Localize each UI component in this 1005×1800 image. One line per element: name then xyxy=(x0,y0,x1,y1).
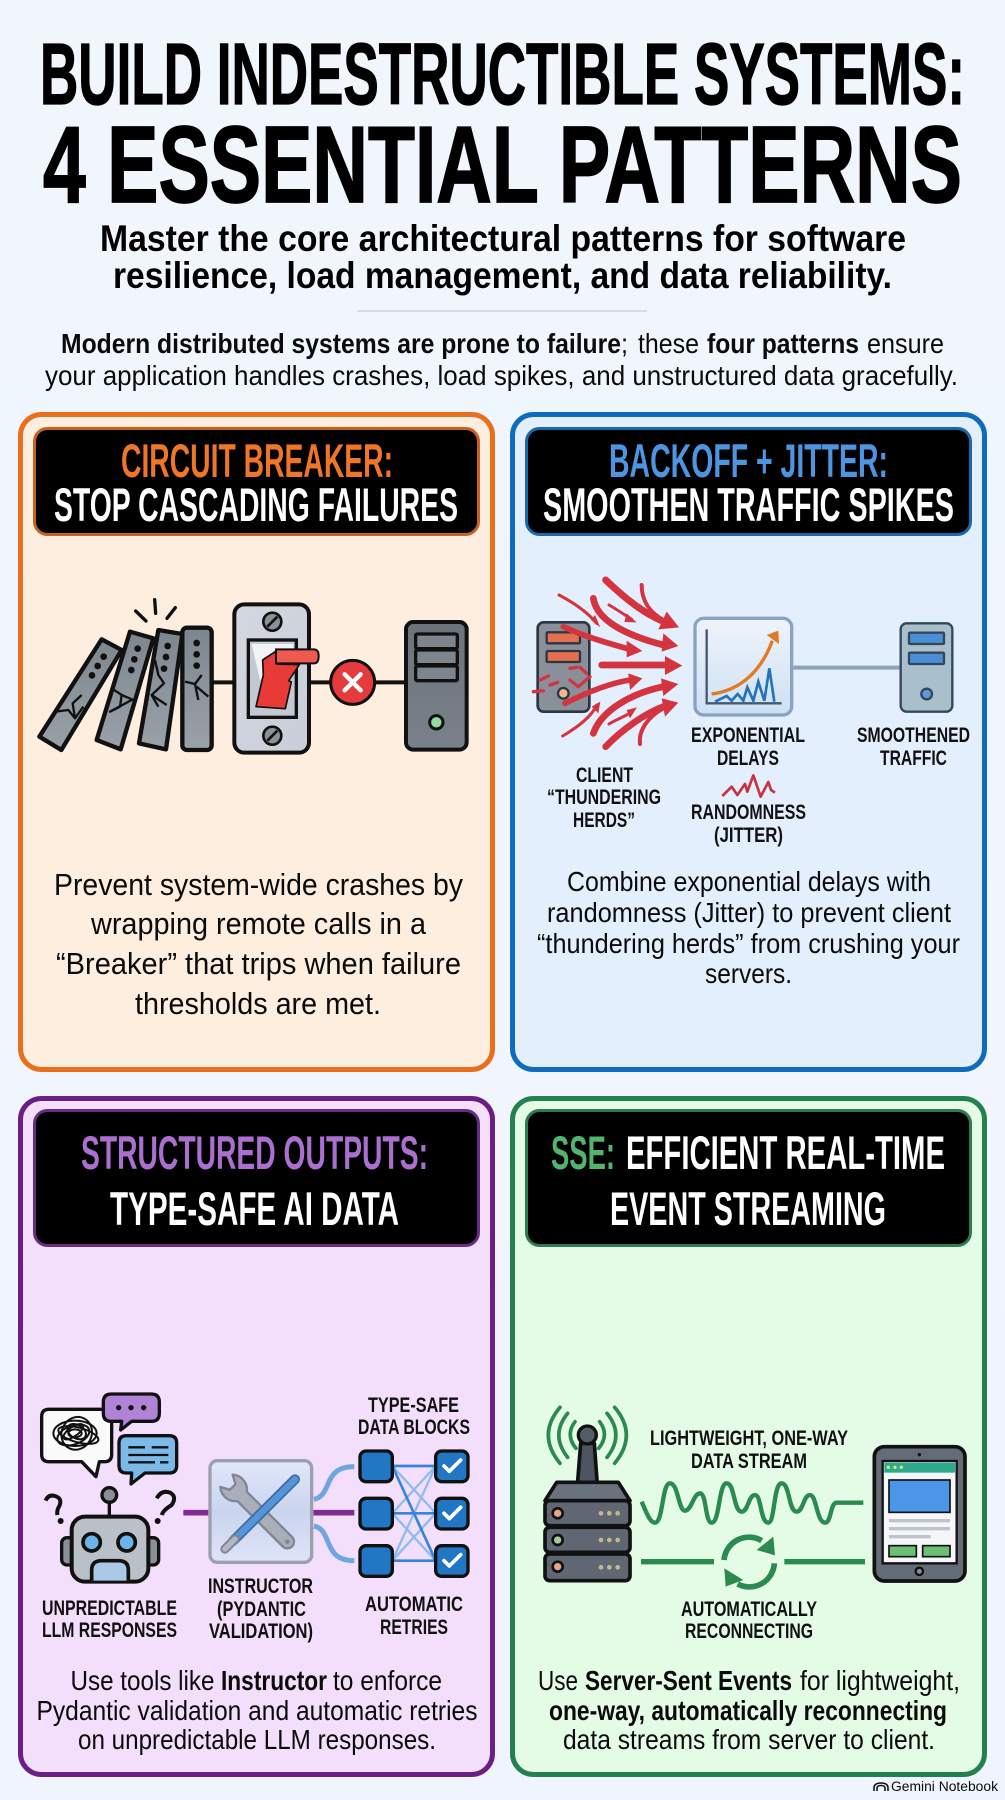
diagram: robot, instructor tools, data blocks xyxy=(42,1394,468,1582)
heading: structured outputs: TYPE-SAFE AI DATA xyxy=(110,1183,399,1236)
description: circuit breaker: thresholds are met. xyxy=(135,986,381,1021)
panel: backoff and jitter xyxy=(512,414,984,1070)
description: backoff and jitter xyxy=(537,866,960,989)
description: structured outputs: to enforce xyxy=(333,1665,442,1696)
label: instructor pydantic validation: INSTRUCTOR xyxy=(208,1575,313,1598)
subtitle: resilience, load management, and data reliability. xyxy=(113,255,892,296)
label: automatically reconnecting xyxy=(681,1598,817,1643)
label: smoothened traffic: SMOOTHENED xyxy=(857,724,970,747)
label: automatic retries xyxy=(365,1593,463,1639)
label: type-safe data blocks: DATA BLOCKS xyxy=(358,1416,470,1439)
label: automatically reconnecting: AUTOMATICALLY xyxy=(681,1598,817,1621)
description: server-sent events: Use xyxy=(538,1665,578,1696)
intro text: your application handles crashes, load spikes, and unstructured data gracefully. xyxy=(45,360,958,391)
description: server-sent events: for lightweight, xyxy=(800,1665,960,1696)
description: server-sent events: data streams from server to client. xyxy=(563,1724,935,1755)
description: backoff and jitter: randomness (Jitter) to prevent client xyxy=(547,897,951,928)
heading: structured outputs: STRUCTURED OUTPUTS: xyxy=(81,1127,428,1180)
intro text: ; xyxy=(621,328,628,359)
heading: circuit breaker xyxy=(34,428,478,534)
intro text: these xyxy=(638,328,699,359)
intro text: Modern distributed systems are prone to failure xyxy=(61,328,621,359)
label: automatic retries: RETRIES xyxy=(380,1616,448,1639)
subtitle: Master the core architectural patterns for software xyxy=(100,218,906,259)
label: client thundering herds: CLIENT xyxy=(576,764,633,787)
label: lightweight one-way data stream: DATA STREAM xyxy=(691,1450,807,1473)
heading: circuit breaker: STOP CASCADING FAILURES xyxy=(54,479,458,532)
intro text: four patterns xyxy=(707,328,859,359)
diagram: server, data stream, tablet xyxy=(545,1407,965,1587)
description: structured outputs: Instructor xyxy=(221,1665,327,1696)
label: exponential delays: EXPONENTIAL xyxy=(691,724,805,747)
label: unpredictable LLM responses xyxy=(42,1597,177,1642)
label: automatically reconnecting: RECONNECTING xyxy=(685,1620,813,1643)
label: lightweight one-way data stream: LIGHTWEIGHT, ONE-WAY xyxy=(650,1427,848,1450)
label: randomness jitter: RANDOMNESS xyxy=(691,801,806,824)
icon: wrench xyxy=(218,1472,301,1555)
label: randomness jitter xyxy=(691,801,806,847)
label: smoothened traffic xyxy=(857,724,970,770)
footer: gemini notebook credit: Gemini Notebook xyxy=(891,1779,998,1794)
label: type-safe data blocks xyxy=(358,1394,470,1439)
panel: circuit breaker xyxy=(20,414,492,1070)
label: client thundering herds: “THUNDERING xyxy=(547,786,661,809)
label: automatic retries: AUTOMATIC xyxy=(365,1593,463,1616)
description: structured outputs: on unpredictable LLM responses. xyxy=(78,1724,436,1755)
heading: server-sent events: SSE: xyxy=(551,1127,615,1180)
label: instructor pydantic validation: VALIDATION) xyxy=(209,1620,313,1643)
description: backoff and jitter: Combine exponential delays with xyxy=(567,866,931,897)
heading: circuit breaker: CIRCUIT BREAKER: xyxy=(121,435,393,488)
label: client thundering herds: HERDS” xyxy=(573,809,635,832)
description: structured outputs: Use tools like xyxy=(70,1665,214,1696)
description: circuit breaker xyxy=(54,867,463,1021)
label: lightweight one-way data stream xyxy=(650,1427,848,1473)
icon: falling dominoes, breaker switch, server xyxy=(39,600,467,753)
label: instructor pydantic validation xyxy=(208,1575,313,1643)
description: circuit breaker: wrapping remote calls in a xyxy=(90,906,427,941)
heading: backoff and jitter xyxy=(526,428,970,534)
label: smoothened traffic: TRAFFIC xyxy=(880,747,947,770)
panel: server-sent events xyxy=(512,1098,984,1774)
intro text: ensure xyxy=(867,328,944,359)
icon: question marks xyxy=(46,1492,174,1524)
diagram: client herds to delays to smoothed traffic xyxy=(533,580,952,797)
heading: structured outputs xyxy=(34,1110,478,1246)
description: structured outputs: Pydantic validation and automatic retries xyxy=(36,1695,478,1726)
label: unpredictable LLM responses: UNPREDICTABLE xyxy=(42,1597,177,1620)
panel: structured outputs xyxy=(20,1098,492,1774)
label: randomness jitter: (JITTER) xyxy=(714,824,783,847)
label: exponential delays: DELAYS xyxy=(717,747,779,770)
subtitle xyxy=(100,218,906,296)
intro text xyxy=(45,328,958,391)
description: structured outputs xyxy=(36,1665,478,1755)
description: server-sent events xyxy=(538,1665,960,1755)
description: backoff and jitter: “thundering herds” from crushing your xyxy=(537,928,960,959)
description: circuit breaker: “Breaker” that trips when failure xyxy=(56,946,461,981)
heading: server-sent events xyxy=(526,1110,970,1246)
title xyxy=(40,26,965,226)
label: type-safe data blocks: TYPE-SAFE xyxy=(368,1394,459,1417)
label: instructor pydantic validation: (PYDANTIC xyxy=(217,1598,306,1621)
label: client thundering herds xyxy=(547,764,661,832)
description: backoff and jitter: servers. xyxy=(705,958,792,989)
label: exponential delays xyxy=(691,724,805,770)
description: server-sent events: Server-Sent Events xyxy=(585,1665,792,1696)
description: circuit breaker: Prevent system-wide crashes by xyxy=(54,867,463,902)
label: unpredictable LLM responses: LLM RESPONSES xyxy=(42,1619,177,1642)
